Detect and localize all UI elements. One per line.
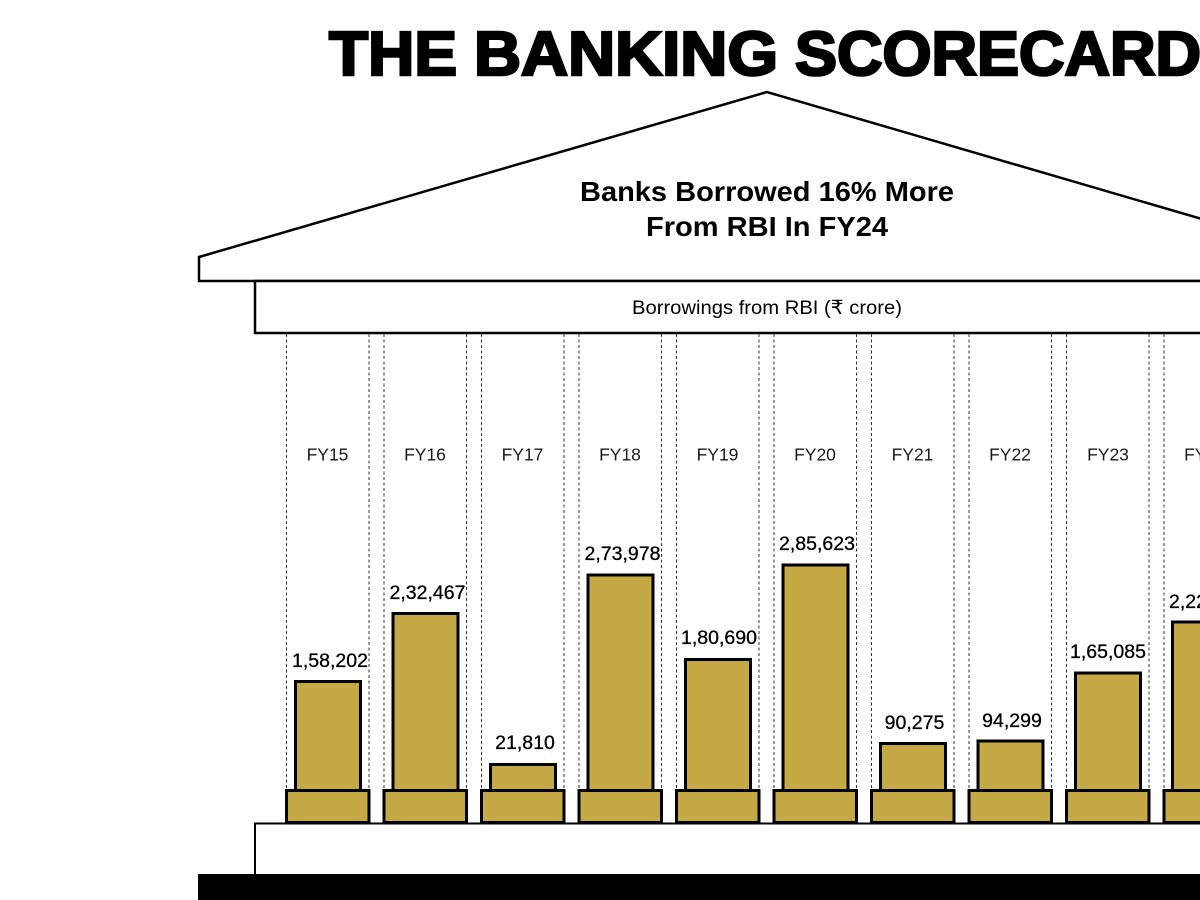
- column: FY16: FY16: [404, 444, 446, 464]
- column: FY19: FY19: [697, 444, 738, 464]
- column: FY21: 90,275: [885, 712, 944, 734]
- column: FY16: 2,32,467: [390, 582, 465, 604]
- column: FY19: 1,80,690: [681, 627, 757, 649]
- column: FY15: [286, 334, 369, 822]
- column: FY16: [384, 334, 466, 822]
- column: FY18: FY18: [599, 444, 641, 464]
- column: FY18: 2,73,978: [585, 543, 660, 565]
- roof heading: Banks Borrowed 16% More: [580, 176, 954, 207]
- roof pediment: [199, 92, 1200, 281]
- column: FY21: [872, 334, 954, 822]
- title: SCORECARD: [795, 20, 1200, 89]
- frieze label: Borrowings from RBI (₹ crore): [632, 297, 902, 319]
- column: FY21: FY21: [892, 444, 933, 464]
- column: FY23: [1066, 334, 1149, 822]
- roof heading: [580, 176, 954, 242]
- column: FY17: FY17: [502, 444, 543, 464]
- column: FY17: [482, 334, 564, 822]
- title: BANKING: [474, 20, 778, 89]
- column: FY20: 2,85,623: [779, 533, 855, 555]
- column: FY20: FY20: [794, 444, 836, 464]
- column: FY24: [1164, 334, 1200, 822]
- column: FY15: 1,58,202: [292, 650, 368, 672]
- column: FY20: [774, 334, 856, 822]
- column: FY15: FY15: [307, 444, 348, 464]
- title: [329, 20, 1200, 89]
- column: FY23: 1,65,085: [1070, 641, 1146, 663]
- column: FY22: [969, 334, 1052, 822]
- column: FY18: [579, 334, 662, 822]
- column: FY23: FY23: [1087, 444, 1129, 464]
- column: FY22: FY22: [989, 444, 1031, 464]
- base slab: [198, 874, 1200, 900]
- column: FY22: 94,299: [982, 710, 1042, 732]
- roof heading: From RBI In FY24: [646, 211, 889, 242]
- title: THE: [329, 20, 457, 89]
- plinth: [255, 824, 1200, 875]
- column: FY17: 21,810: [495, 732, 555, 754]
- column: FY19: [676, 334, 759, 822]
- frieze band: [255, 281, 1200, 333]
